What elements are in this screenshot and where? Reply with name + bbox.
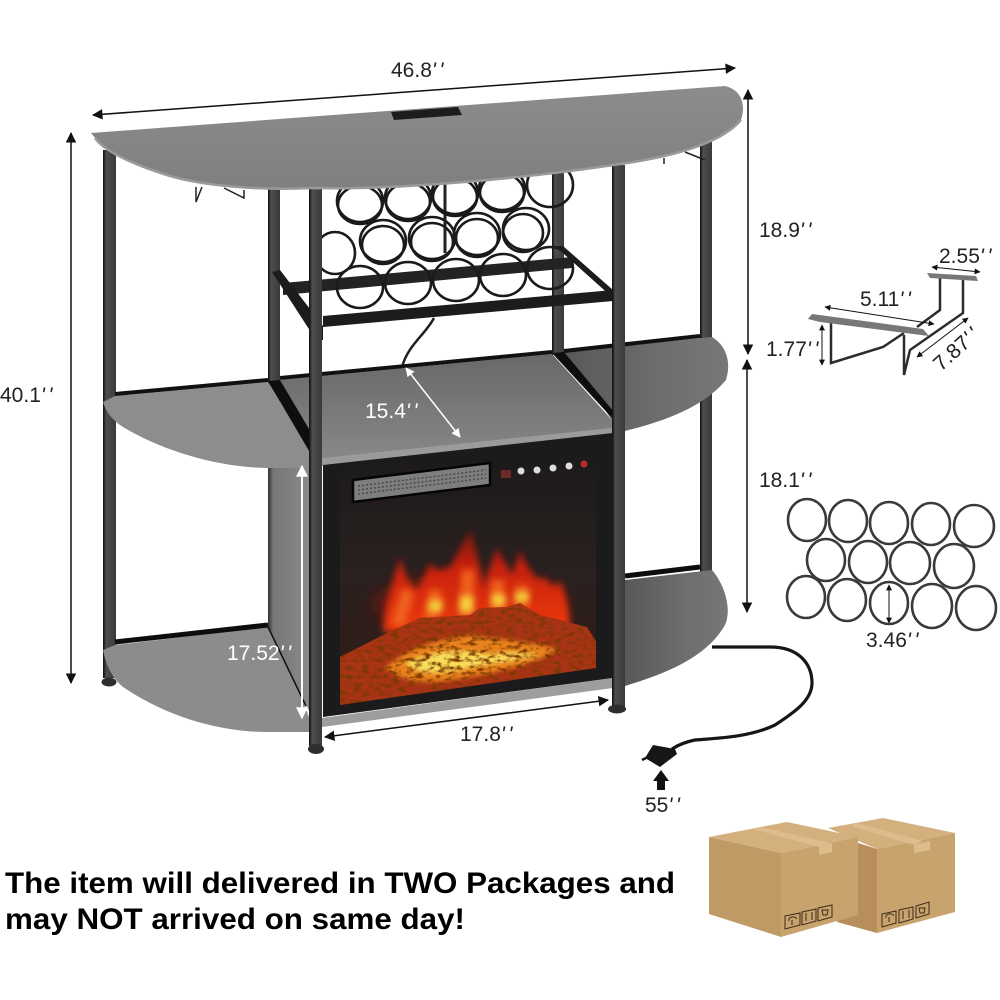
label 1.77: [766, 325, 822, 365]
power outlet on top: [391, 107, 462, 120]
label 3.46: [866, 585, 922, 652]
burning logs: [340, 603, 597, 706]
label 2.55: 2.55'': [939, 245, 995, 268]
handling icons: [785, 902, 929, 929]
rack center rod: [444, 183, 446, 253]
heater grille: [353, 463, 490, 502]
dimension: lower height 18.1: 18.1'': [759, 469, 815, 492]
front posts: [309, 165, 625, 746]
dimension: depth 15.4: 15.4'': [365, 400, 421, 423]
dimension: total width 46.8: 46.8'': [391, 59, 447, 82]
feet: [102, 678, 626, 754]
delivery notice text: The item will delivered in TWO Packages and: [5, 867, 675, 900]
rear posts: [103, 140, 712, 678]
wine rack rear bar: [283, 257, 572, 295]
front box: [709, 822, 858, 937]
label 7.87: 7.87'': [929, 321, 986, 376]
flames: [375, 530, 570, 632]
dimension: cord length 55: 55'': [645, 794, 683, 817]
top surface: [91, 86, 743, 189]
cardboard boxes: [709, 818, 955, 937]
label 1.77: 1.77'': [766, 338, 822, 361]
dimension: depth 15.4: [365, 368, 460, 437]
label 5.11: [825, 288, 934, 324]
dimension: cord length 55: [645, 770, 683, 817]
glass holders under top: [196, 152, 705, 202]
shelf right wing: [564, 337, 728, 431]
label 3.46: 3.46'': [866, 629, 922, 652]
middle shelf: [103, 336, 728, 468]
label 5.11: 5.11'': [860, 288, 914, 311]
shelf left wing: [103, 382, 310, 468]
lower shelf: [103, 567, 728, 732]
glass holder wire: [831, 278, 963, 375]
dimension: total width 46.8: [93, 59, 735, 115]
shelf centre: [280, 354, 612, 466]
wine rack frame: [272, 246, 613, 340]
delivery notice text: [5, 867, 675, 936]
back box: [828, 818, 955, 933]
delivery notice text: may NOT arrived on same day!: [5, 903, 465, 936]
dimension: fireplace height 17.52: 17.52'': [227, 642, 295, 665]
fireplace frame: [323, 433, 613, 717]
fireplace: [322, 433, 613, 727]
detail: wine rack rings: [787, 499, 996, 652]
rings: [787, 499, 996, 630]
glass holder plates: [808, 273, 978, 336]
detail: glass holder: [766, 245, 995, 376]
dimension: fireplace width 17.8: 17.8'': [460, 723, 516, 746]
fireplace bottom trim: [322, 678, 613, 727]
fireplace side panel: [268, 466, 312, 716]
wine rack rings: [315, 163, 573, 308]
dimension: total height 40.1: 40.1'': [0, 384, 56, 407]
dimension: fireplace width 17.8: [325, 700, 608, 746]
fireplace glass: [340, 516, 596, 705]
power cord inside: [402, 318, 434, 367]
control panel buttons: [501, 460, 588, 478]
power cord and plug: [642, 647, 812, 767]
dimension: upper height 18.9: 18.9'': [759, 219, 815, 242]
furniture: console with fireplace: [91, 86, 812, 817]
